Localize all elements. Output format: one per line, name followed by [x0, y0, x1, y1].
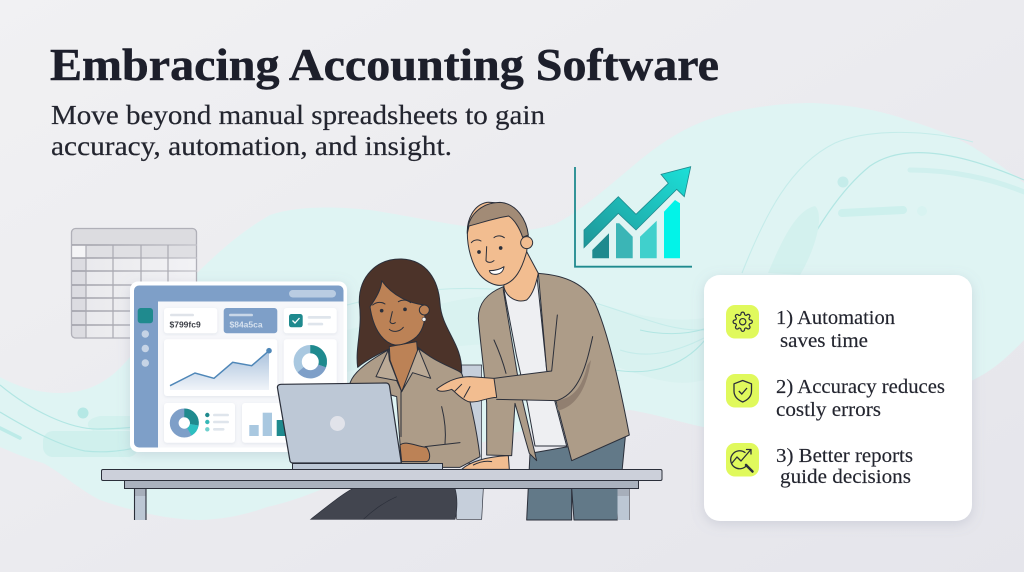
man arm — [494, 357, 590, 401]
dashboard header bar — [134, 286, 344, 302]
subtitle: Move beyond manual spreadsheets to gain — [51, 100, 546, 130]
icon: gear — [726, 305, 759, 338]
growth arrow — [584, 167, 691, 248]
people illustration — [311, 202, 629, 520]
benefit 3 text: guide decisions — [780, 466, 911, 488]
laptop — [277, 383, 442, 470]
woman collar — [376, 350, 402, 392]
man trousers — [527, 437, 625, 520]
man head — [467, 202, 528, 285]
benefit 2: accuracy — [726, 374, 945, 421]
man — [437, 202, 629, 520]
benefit 1 text: saves time — [780, 330, 868, 352]
man jacket left — [478, 287, 537, 461]
woman — [350, 259, 480, 467]
benefit 3: reports — [726, 443, 913, 488]
woman hand — [400, 443, 430, 462]
dashboard header pill — [289, 290, 336, 298]
woman ear — [419, 305, 429, 315]
desk top — [102, 470, 662, 480]
growth bars — [592, 200, 680, 258]
growth chart icon — [575, 167, 692, 267]
benefit 2 text: 2) Accuracy reduces — [776, 376, 945, 398]
woman face — [370, 281, 425, 345]
donut chart card — [284, 339, 337, 396]
man lower hand — [462, 456, 509, 469]
man smile — [489, 267, 504, 274]
desk underside — [124, 480, 638, 488]
stat card two — [224, 308, 277, 333]
benefits card — [704, 275, 972, 521]
benefit 1 text: 1) Automation — [776, 307, 895, 329]
man pointing hand — [437, 377, 497, 402]
benefit 1: automation — [726, 305, 895, 352]
benefit 2 text: costly errors — [776, 399, 881, 421]
subtitle second line: accuracy, automation, and insight. — [51, 131, 452, 161]
man neck — [503, 252, 538, 301]
donut legend card — [164, 403, 235, 443]
dashboard panel — [130, 282, 347, 452]
checklist card — [284, 308, 337, 333]
man shirt — [504, 273, 567, 446]
chair — [443, 365, 483, 519]
spreadsheet illustration — [72, 228, 197, 338]
laptop lid — [277, 383, 401, 463]
woman earring — [422, 317, 426, 321]
stat card one — [164, 308, 217, 333]
man hair — [467, 202, 528, 237]
title: Embracing Accounting Software — [50, 39, 719, 90]
line chart card — [164, 339, 277, 396]
woman legs — [311, 488, 457, 519]
icon: shield — [726, 374, 759, 408]
woman neck — [389, 342, 418, 392]
laptop logo — [330, 416, 345, 431]
woman blouse — [350, 348, 480, 467]
bar chart card — [242, 403, 337, 443]
man jacket right — [538, 273, 629, 461]
stat card two: $84a5ca — [230, 319, 263, 329]
icon: chart magnifier — [726, 443, 759, 476]
desk — [102, 470, 662, 520]
dashboard sidebar — [134, 301, 158, 448]
benefit 3 text: 3) Better reports — [776, 445, 913, 467]
man ear — [521, 237, 533, 249]
desk legs — [134, 488, 629, 520]
stat card one: $799fc9 — [170, 319, 201, 329]
woman hair — [357, 259, 462, 373]
laptop base — [292, 464, 442, 470]
